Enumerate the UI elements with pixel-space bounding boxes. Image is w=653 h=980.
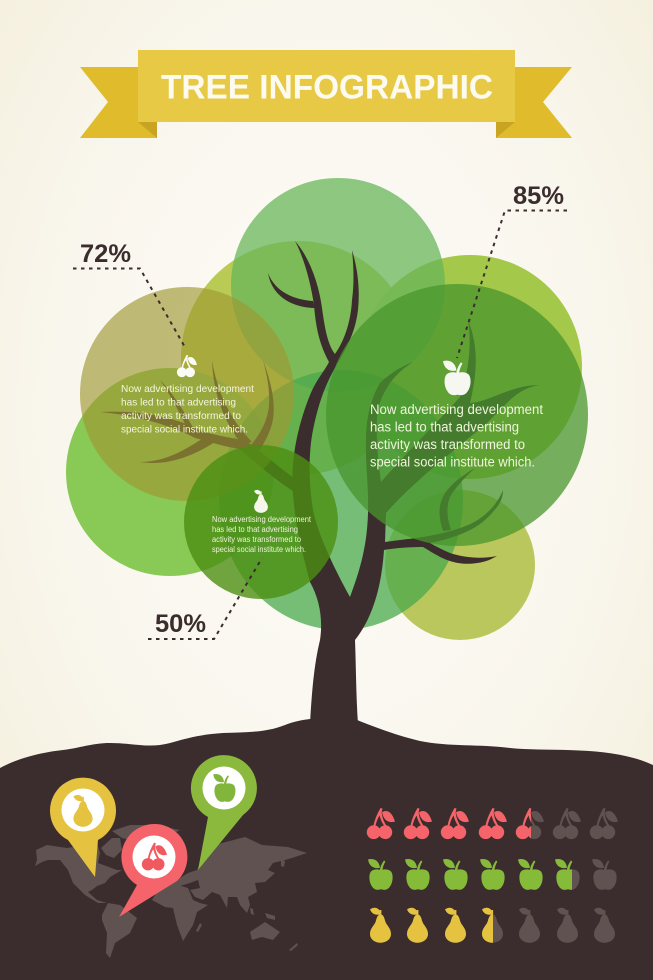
canopy front circle: 72% [80, 287, 294, 501]
icon row: apples 5.5 of 7 [368, 859, 617, 890]
text block: has led to that advertising [121, 398, 236, 408]
ground [0, 719, 653, 980]
icon: cherry [177, 355, 197, 377]
icon: apple [213, 774, 235, 802]
icon: pear [73, 795, 93, 827]
text block: Now advertising development [212, 515, 312, 524]
title ribbon [80, 50, 572, 138]
callout: 72%: 72% [80, 240, 131, 268]
callout: 50% [148, 490, 313, 639]
text block: has led to that advertising [212, 525, 298, 534]
icon: cherry [142, 843, 167, 870]
text block: Now advertising development [370, 402, 543, 417]
map pin: cherry [119, 824, 187, 917]
icon: pear [254, 490, 268, 513]
canopy front circle: 50% [184, 445, 338, 599]
text block: activity was transformed to [121, 411, 241, 422]
title: TREE INFOGRAPHIC [161, 68, 493, 106]
tree trunk and branches [100, 241, 540, 724]
text block: Now advertising development [121, 384, 254, 395]
callout: 85%: 85% [513, 182, 564, 210]
icon: apple [443, 361, 471, 395]
text block: activity was transformed to [370, 437, 525, 452]
text block: activity was transformed to [212, 535, 302, 544]
icon row: cherries 5 of 7 [367, 808, 618, 839]
text block: special social institute which. [212, 545, 306, 554]
canopy front circle: 85% [326, 284, 588, 546]
callout: 50%: 50% [155, 610, 206, 638]
world map [35, 825, 307, 958]
callout: 72% [73, 240, 257, 436]
icon row: pears 3.5 of 7 [370, 908, 615, 943]
text block: special social institute which. [121, 424, 248, 436]
map pin: apple [191, 755, 257, 870]
text block: has led to that advertising [370, 420, 519, 434]
tree canopy back circles [66, 178, 582, 640]
map pin: pear [50, 778, 116, 877]
text block: special social institute which. [370, 454, 535, 470]
callout: 85% [370, 182, 567, 470]
